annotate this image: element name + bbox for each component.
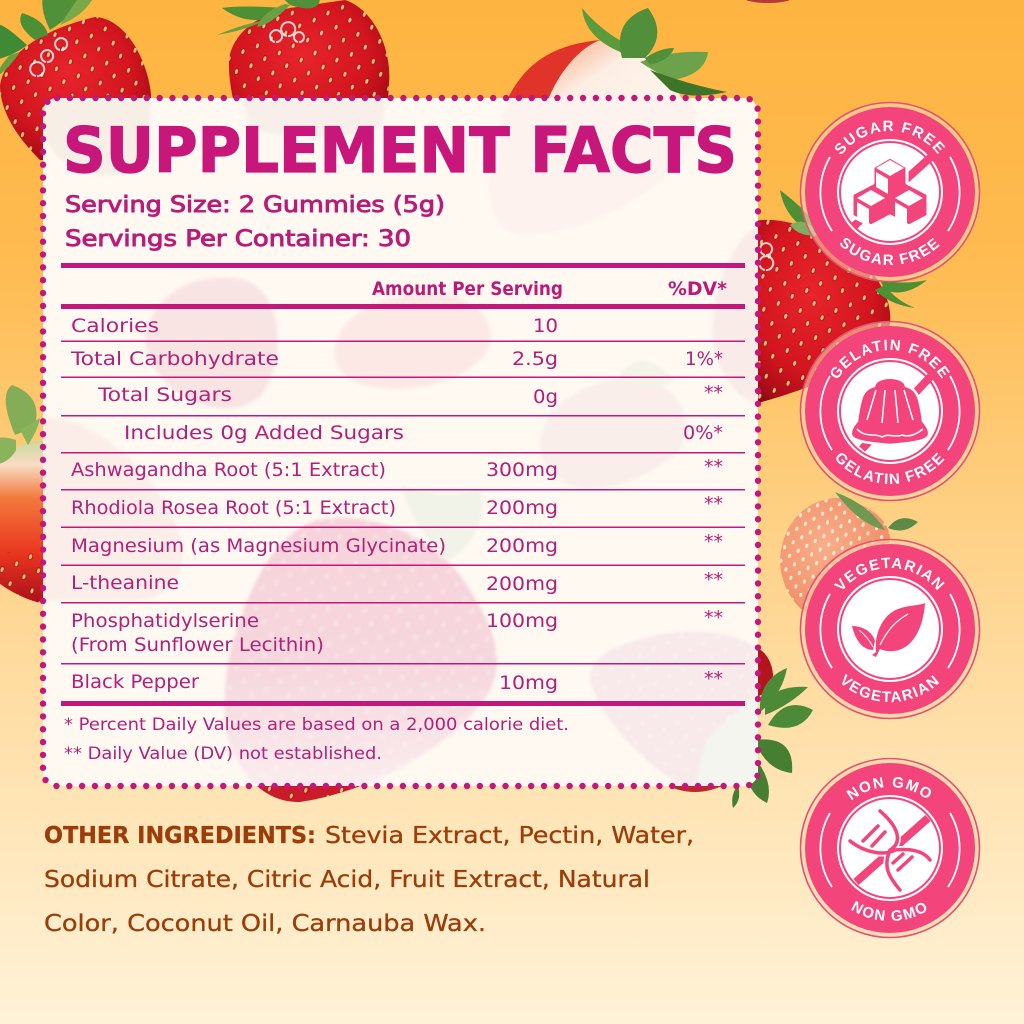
panel: supplement facts [40,95,760,802]
badge: sugar free [800,102,980,282]
icon: dna crossed out [850,811,930,890]
title: SUPPLEMENT FACTS [63,114,737,187]
strawberry: lower right [660,645,813,808]
row: l-theanine: 200mg [486,573,558,595]
badge: non gmo [800,758,980,938]
dotted border [43,98,758,786]
row: phosphatidylserine: Phosphatidylserine [71,610,259,632]
row: total carbohydrate: Total Carbohydrate [70,348,279,370]
row: added sugars: Includes 0g Added Sugars [124,422,404,444]
badge: sugar free: SUGAR FREE [835,120,946,154]
row: rhodiola: 200mg [486,497,558,519]
table header: Amount Per Serving [372,278,563,300]
row: added sugars [124,422,723,444]
table rules [61,263,745,706]
row: magnesium: Magnesium (as Magnesium Glycinate) [71,535,446,557]
badge: non gmo: NON GMO [851,900,926,921]
row: total carbohydrate: 1%* [685,348,723,370]
strawberry: cut half top right [508,8,727,110]
other ingredients: OTHER INGREDIENTS: [44,823,316,849]
row: black pepper: Black Pepper [71,671,199,693]
row: phosphatidylserine: (From Sunflower Lecithin) [71,634,324,656]
strawberry: right [750,190,927,405]
row: magnesium: ** [704,531,723,553]
other ingredients: Stevia Extract, Pectin, Water, [325,823,694,849]
row: rhodiola: Rhodiola Rosea Root (5:1 Extract) [71,497,396,519]
row: ashwagandha: 300mg [486,459,558,481]
ghost strawberries behind table [40,95,760,802]
table header [372,278,727,300]
row: magnesium [71,531,723,557]
row: calories [71,315,558,337]
row: total sugars: 0g [533,386,558,408]
row: rhodiola: ** [704,493,723,515]
row: added sugars: 0%* [683,422,723,444]
other ingredients: Sodium Citrate, Citric Acid, Fruit Extract, Natural [44,867,650,893]
footnotes: * Percent Daily Values are based on a 2,000 calorie diet. [64,715,569,735]
icon: sugar cubes crossed out [852,156,932,226]
serving info: Serving Size: 2 Gummies (5g) [65,193,445,218]
row: black pepper: ** [704,668,723,690]
row: rhodiola [71,493,723,519]
strawberry: pale right [780,492,918,618]
badge: vegetarian [800,538,980,720]
row: phosphatidylserine: ** [704,607,723,629]
serving info [65,193,445,252]
row: l-theanine: L-theanine [71,572,179,594]
row: phosphatidylserine [71,607,723,656]
icon: jelly mould crossed out [851,375,932,449]
row: calories: 10 [533,315,558,337]
badge: gelatin free: GELATIN FREE [836,452,944,484]
badge: gelatin free: GELATIN FREE [830,340,950,378]
row: total sugars: Total Sugars [97,384,232,406]
row: phosphatidylserine: 100mg [486,610,558,632]
row: black pepper: 10mg [499,672,558,694]
other ingredients [44,823,694,937]
row: total sugars: ** [704,382,723,404]
other ingredients: Color, Coconut Oil, Carnauba Wax. [44,911,486,937]
badge: vegetarian: VEGETARIAN [842,674,940,702]
badge: non gmo: NON GMO [846,777,931,800]
row: calories: Calories [71,315,159,337]
row: total carbohydrate: 2.5g [512,348,558,370]
row: ashwagandha [71,456,723,481]
row: magnesium: 200mg [486,535,558,557]
strawberry: left cut [0,385,50,605]
row: ashwagandha: Ashwagandha Root (5:1 Extract) [71,459,386,481]
serving info: Servings Per Container: 30 [65,227,411,252]
row: l-theanine [71,569,723,595]
row: ashwagandha: ** [704,456,723,478]
footnotes: ** Daily Value (DV) not established. [64,744,382,764]
row: total sugars [97,382,723,408]
row: l-theanine: ** [704,569,723,591]
footnotes [64,715,569,764]
strawberry: large lower centre [225,518,497,802]
icon: leaves [852,603,925,657]
strawberry: top left [0,0,151,160]
panel background [43,98,758,786]
badge: gelatin free [800,320,980,502]
row: black pepper [71,668,723,694]
row: total carbohydrate [70,348,723,370]
badge: vegetarian: VEGETARIAN [834,558,944,590]
badge: sugar free: SUGAR FREE [840,238,940,265]
strawberry: top edge [744,0,792,3]
strawberry: top centre [217,0,389,140]
table header: %DV* [668,278,727,300]
